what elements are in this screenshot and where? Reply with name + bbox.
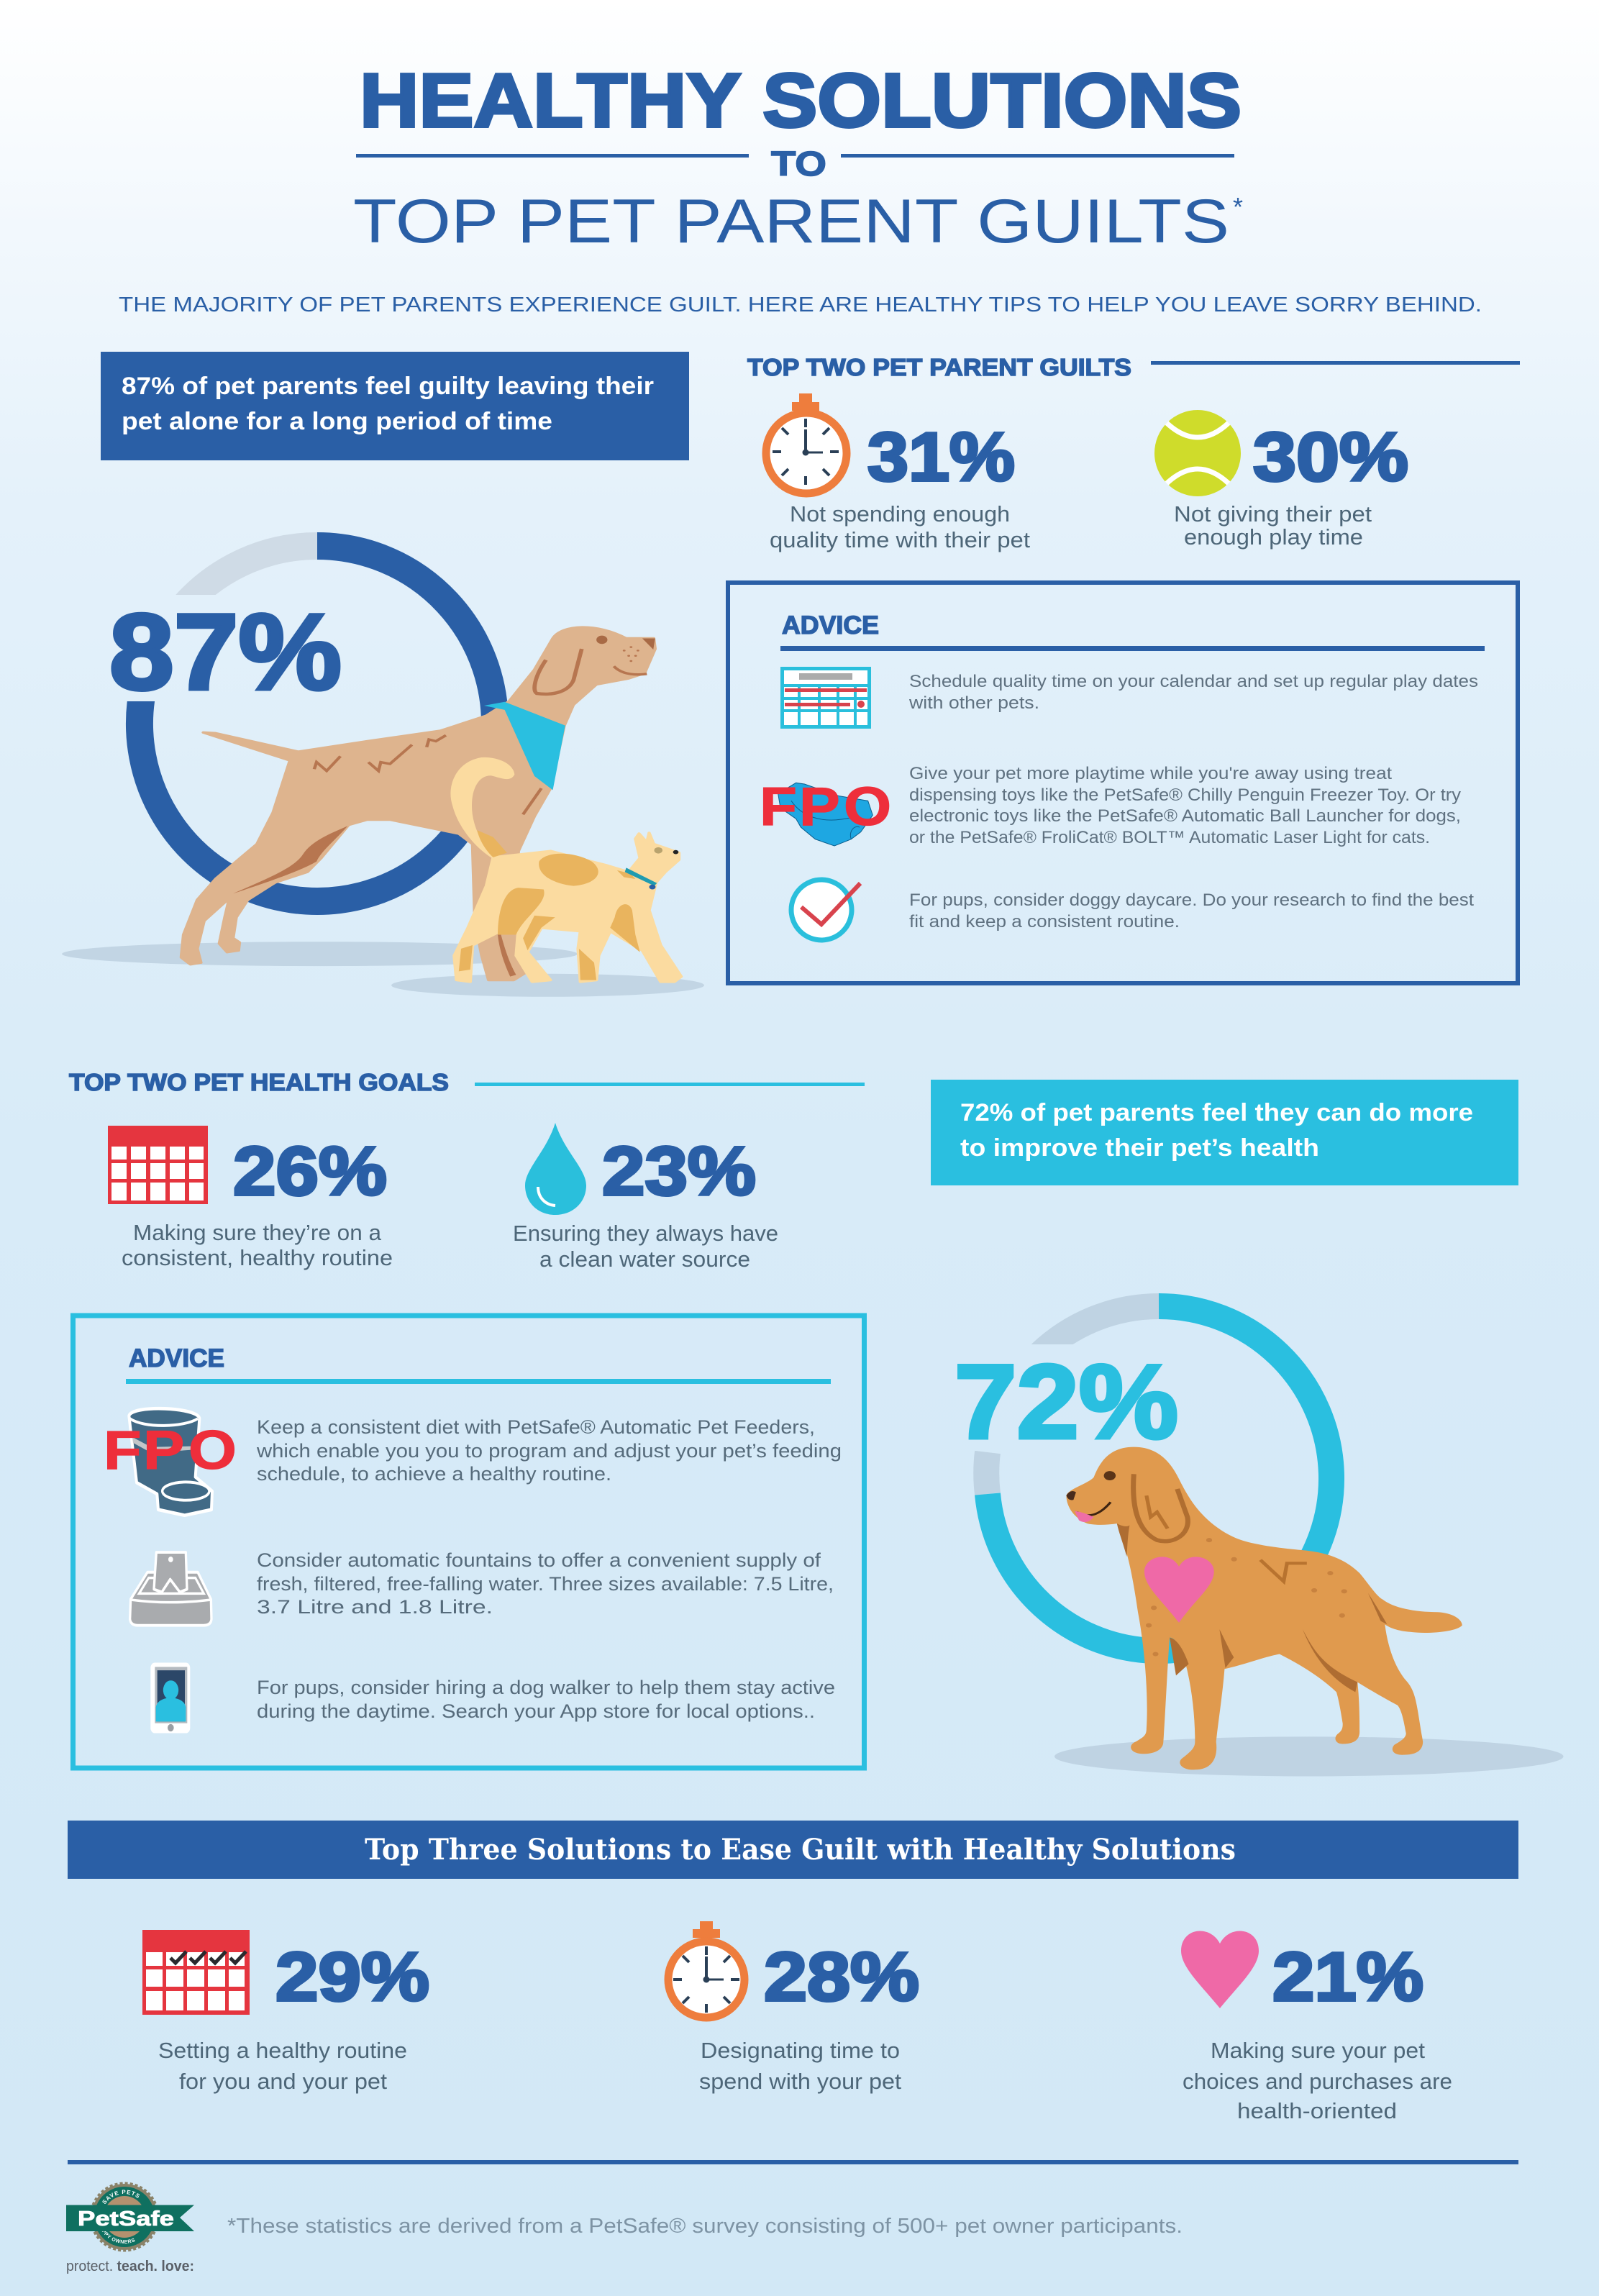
chart: 87% ring: 87%	[109, 591, 342, 712]
icon: tennis ball	[1154, 410, 1241, 496]
icon: automatic feeder with FPO stamp: P	[143, 1421, 184, 1481]
stat: 28% time	[668, 1921, 919, 2094]
stat: 23% water: 23%	[602, 1133, 756, 1210]
icon: phone	[150, 1662, 190, 1734]
stat: 31% quality time	[766, 393, 1030, 552]
advice text: toys: or the PetSafe® FroliCat® BOLT™ Automatic Laser Light for cats.	[909, 828, 1430, 847]
stat: 23% water: Ensuring they always have	[513, 1221, 778, 1246]
icon: calendar with checks	[142, 1930, 250, 2015]
icon: teal calendar	[780, 667, 871, 729]
advice text: feeders: which enable you you to program and adjust your pet’s feeding	[256, 1440, 842, 1462]
advice text: toys: Give your pet more playtime while you're away using treat	[909, 764, 1392, 783]
advice text: feeders	[256, 1416, 842, 1485]
callout: 72% of pet parents: to improve their pet’s health	[960, 1134, 1319, 1162]
panel: advice (guilts)	[728, 583, 1518, 983]
subtitle: THE MAJORITY OF PET PARENTS EXPERIENCE GUILT. HERE ARE HEALTHY TIPS TO HELP YOU LEAVE SORRY BEHIND.	[119, 293, 1482, 316]
advice text: schedule: Schedule quality time on your calendar and set up regular play dates	[909, 672, 1478, 691]
advice text: schedule	[908, 672, 1478, 713]
icon: heart	[1181, 1931, 1259, 2008]
footnote: *These statistics are derived from a PetSafe® survey consisting of 500+ pet owner participants.	[227, 2215, 1183, 2238]
illustration: dog and cat	[62, 627, 704, 997]
title: TOP PET PARENT GUILTS	[353, 187, 1229, 256]
stat: 31% quality time: 31%	[867, 419, 1015, 496]
stat: 21% health-oriented: choices and purchases are	[1183, 2069, 1452, 2094]
heading: top two pet health goals: TOP TWO PET HEALTH GOALS	[69, 1069, 449, 1095]
stat: 21% health-oriented: 21%	[1272, 1939, 1423, 2015]
cat spots	[459, 830, 640, 980]
bandana	[484, 702, 565, 790]
title: TO	[771, 145, 826, 183]
advice text: walker: For pups, consider hiring a dog walker to help them stay active	[257, 1677, 835, 1698]
advice text: toys: electronic toys like the PetSafe® Automatic Ball Launcher for dogs,	[909, 806, 1461, 826]
callout: 87% of pet parents: 87% of pet parents feel guilty leaving their	[122, 373, 654, 400]
title	[353, 58, 1243, 256]
stat: 21% health-oriented	[1181, 1931, 1452, 2123]
heading: top two pet parent guilts: TOP TWO PET PARENT GUILTS	[747, 354, 1131, 381]
icon: clock	[766, 393, 847, 493]
callout: 87% of pet parents	[101, 352, 689, 460]
stat: 29% routine: Setting a healthy routine	[158, 2038, 407, 2063]
icon: automatic feeder with FPO stamp	[104, 1408, 237, 1516]
stat: 26% routine	[108, 1126, 393, 1270]
advice text: toys: dispensing toys like the PetSafe® Chilly Penguin Freezer Toy. Or try	[909, 785, 1461, 805]
cat	[452, 759, 681, 982]
dog markings	[1134, 1474, 1188, 1541]
icon: check mark	[791, 880, 860, 940]
title: *	[1233, 192, 1243, 222]
icon: heart	[1144, 1557, 1214, 1623]
dog body	[181, 627, 655, 980]
icon: red calendar	[108, 1126, 208, 1204]
title: HEALTHY SOLUTIONS	[360, 58, 1242, 143]
logo: PetSafe: protect. teach. love:	[66, 2259, 194, 2274]
advice text: fountains: 3.7 Litre and 1.8 Litre.	[257, 1596, 493, 1618]
stat: 23% water	[513, 1123, 778, 1272]
stat: 23% water: a clean water source	[539, 1247, 750, 1272]
advice text: daycare: For pups, consider doggy daycare. Do your research to find the best	[909, 890, 1474, 910]
stat: 21% health-oriented: Making sure your pet	[1211, 2038, 1425, 2063]
icon: penguin toy with FPO stamp: F	[760, 777, 797, 837]
dog body	[1066, 1447, 1462, 1769]
icon: water drop	[525, 1123, 586, 1215]
advice text: feeders: schedule, to achieve a healthy routine.	[257, 1463, 611, 1485]
stat: 28% time: spend with your pet	[699, 2069, 901, 2094]
stat: 31% quality time: Not spending enough	[790, 501, 1010, 527]
logo: PetSafe: PetSafe	[78, 2208, 174, 2231]
logo: PetSafe: HAPPY OWNERS	[102, 2231, 135, 2244]
logo: PetSafe	[66, 2182, 194, 2274]
icon: penguin toy with FPO stamp	[760, 777, 891, 846]
logo: PetSafe: SAVE PETS	[102, 2190, 140, 2204]
advice text: fountains: Consider automatic fountains to offer a convenient supply of	[257, 1549, 821, 1571]
banner: top three solutions: Top Three Solutions to Ease Guilt with Healthy Solutions	[365, 1833, 1236, 1867]
callout: 87% of pet parents: pet alone for a long period of time	[122, 408, 552, 435]
stat: 31% quality time: quality time with their pet	[770, 527, 1030, 552]
stat: 30% play time	[1154, 410, 1408, 550]
advice text: walker	[257, 1677, 835, 1722]
icon: automatic feeder with FPO stamp: O	[188, 1421, 237, 1481]
stat: 30% play time: enough play time	[1184, 524, 1363, 550]
advice text: daycare: fit and keep a consistent routine.	[909, 912, 1180, 931]
dog markings	[534, 649, 582, 694]
stat: 26% routine: 26%	[233, 1133, 387, 1210]
advice text: fountains	[257, 1549, 834, 1618]
heading: advice: ADVICE	[129, 1344, 224, 1372]
advice text: walker: during the daytime. Search your App store for local options..	[257, 1700, 815, 1722]
advice text: fountains: fresh, filtered, free-falling water. Three sizes available: 7.5 Litre,	[257, 1573, 834, 1595]
panel: advice (health)	[73, 1316, 865, 1768]
icon: clock	[668, 1921, 744, 2018]
stat: 30% play time: Not giving their pet	[1174, 501, 1372, 527]
stat: 29% routine: for you and your pet	[179, 2069, 387, 2094]
stat: 29% routine: 29%	[275, 1939, 429, 2015]
stat: 28% time: Designating time to	[701, 2038, 900, 2063]
chart: 87% ring	[109, 546, 495, 901]
advice text: daycare	[909, 890, 1474, 931]
icon: automatic feeder with FPO stamp: F	[104, 1421, 142, 1481]
heading: top two pet health goals	[69, 1069, 865, 1095]
chart: 72% ring	[955, 1306, 1331, 1651]
advice text: feeders: Keep a consistent diet with PetSafe® Automatic Pet Feeders,	[257, 1416, 815, 1438]
stat: 21% health-oriented: health-oriented	[1237, 2098, 1397, 2123]
advice text: schedule: with other pets.	[908, 693, 1039, 713]
callout: 72% of pet parents	[931, 1080, 1518, 1185]
icon: penguin toy with FPO stamp: P	[799, 777, 840, 837]
icon: penguin toy with FPO stamp: O	[844, 777, 891, 837]
advice text: toys	[909, 764, 1461, 847]
banner: top three solutions	[68, 1821, 1518, 1879]
heading: top two pet parent guilts	[747, 354, 1520, 381]
chart: 72% ring: 72%	[955, 1343, 1178, 1460]
stat: 26% routine: consistent, healthy routine	[122, 1245, 393, 1270]
callout: 72% of pet parents: 72% of pet parents feel they can do more	[960, 1099, 1473, 1126]
stat: 26% routine: Making sure they’re on a	[133, 1220, 382, 1245]
icon: water fountain	[130, 1552, 211, 1626]
heading: advice: ADVICE	[782, 611, 879, 639]
stat: 29% routine	[142, 1930, 429, 2094]
illustration: golden dog with heart	[1054, 1447, 1564, 1776]
stat: 28% time: 28%	[764, 1939, 919, 2015]
stat: 30% play time: 30%	[1253, 419, 1408, 496]
